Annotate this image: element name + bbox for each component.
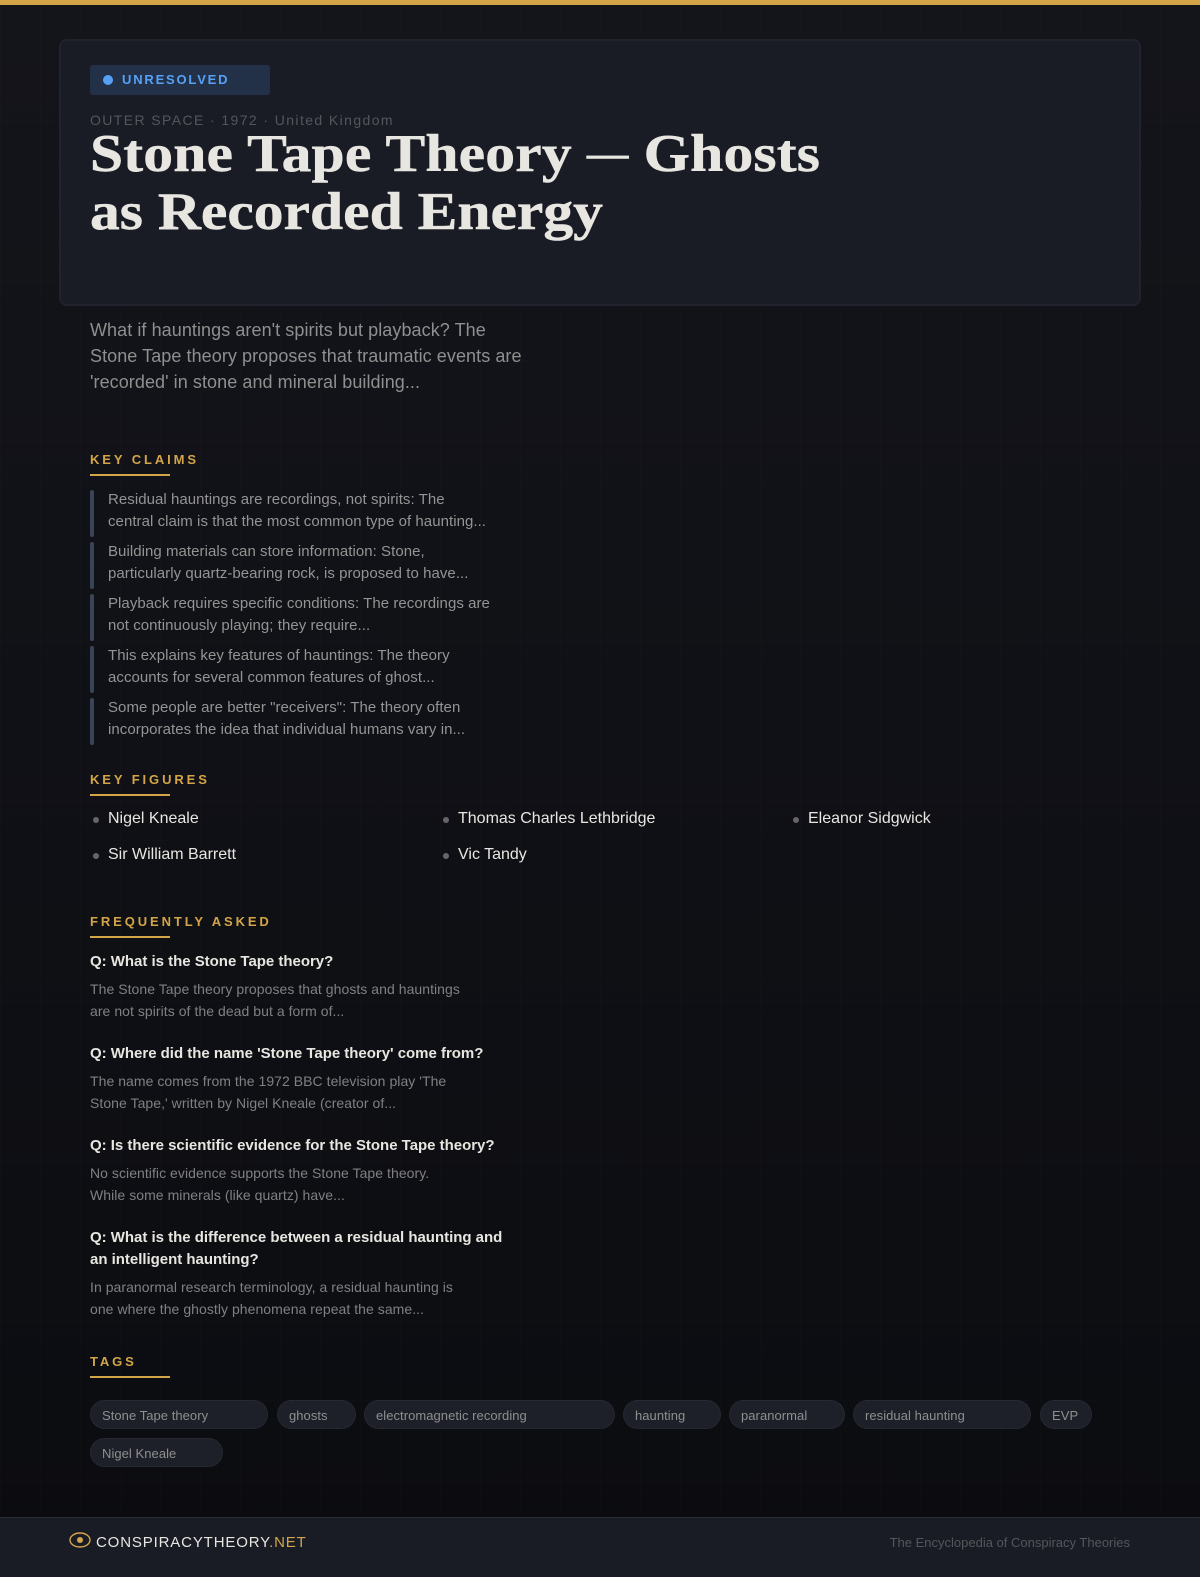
tag: electromagnetic recording — [376, 1408, 527, 1423]
figure: Sir William Barrett: Sir William Barrett — [108, 846, 236, 863]
claim 3: not continuously playing; they require... — [108, 617, 370, 634]
claim 4: accounts for several common features of ghost... — [108, 669, 435, 686]
claim 2: Building materials can store information: Stone, — [108, 543, 425, 560]
icon: eye logo — [69, 1532, 91, 1548]
tag: residual haunting — [865, 1408, 965, 1423]
lede text — [90, 320, 522, 392]
faq 2: Q: Where did the name 'Stone Tape theory' come from? — [90, 1045, 483, 1062]
figure: Eleanor Sidgwick: Eleanor Sidgwick — [808, 810, 931, 827]
tag — [623, 1400, 721, 1429]
panel: key claims — [90, 490, 490, 745]
heading: tags: TAGS — [90, 1354, 137, 1369]
faq 2: The name comes from the 1972 BBC television play 'The — [90, 1073, 446, 1089]
faq 4: In paranormal research terminology, a residual haunting is — [90, 1279, 453, 1295]
status badge — [90, 65, 270, 95]
claim 2: particularly quartz-bearing rock, is proposed to have... — [108, 565, 468, 582]
faq 2 — [90, 1045, 483, 1111]
tag — [90, 1438, 223, 1467]
panel: tags — [90, 1400, 1092, 1467]
tag — [90, 1400, 268, 1429]
figure: Vic Tandy: Vic Tandy — [458, 846, 527, 863]
tag — [1040, 1400, 1092, 1429]
tag: Stone Tape theory — [102, 1408, 208, 1423]
panel: key figures — [93, 810, 931, 863]
claim 5: Some people are better "receivers": The theory often — [108, 699, 460, 716]
faq 1: The Stone Tape theory proposes that ghosts and hauntings — [90, 981, 460, 997]
category line: OUTER SPACE · 1972 · United Kingdom — [90, 112, 394, 128]
faq 4: an intelligent haunting? — [90, 1251, 259, 1268]
tag: ghosts — [289, 1408, 328, 1423]
heading: key figures: KEY FIGURES — [90, 772, 210, 787]
faq 3: Q: Is there scientific evidence for the Stone Tape theory? — [90, 1137, 494, 1154]
faq 1: are not spirits of the dead but a form of... — [90, 1003, 344, 1019]
claim 1 — [90, 490, 486, 537]
faq 3: While some minerals (like quartz) have... — [90, 1187, 345, 1203]
heading: frequently asked: FREQUENTLY ASKED — [90, 914, 272, 929]
footer — [0, 1517, 1200, 1577]
lede text: 'recorded' in stone and mineral building... — [90, 372, 420, 392]
lede text: What if hauntings aren't spirits but playback? The — [90, 320, 486, 340]
claim 5 — [90, 698, 465, 745]
tag: haunting — [635, 1408, 685, 1423]
claim 4: This explains key features of hauntings: The theory — [108, 647, 450, 664]
claim 1: central claim is that the most common type of haunting... — [108, 513, 486, 530]
claim 2 — [90, 542, 468, 589]
faq 4: one where the ghostly phenomena repeat the same... — [90, 1301, 424, 1317]
heading: key claims: KEY CLAIMS — [90, 452, 199, 467]
faq 3 — [90, 1137, 494, 1203]
tag — [364, 1400, 615, 1429]
title — [90, 125, 820, 241]
faq 4: Q: What is the difference between a residual haunting and — [90, 1229, 502, 1246]
claim 1: Residual hauntings are recordings, not spirits: The — [108, 491, 445, 508]
faq 1: Q: What is the Stone Tape theory? — [90, 953, 333, 970]
top accent bar — [0, 0, 1200, 5]
faq 1 — [90, 953, 460, 1019]
tagline: The Encyclopedia of Conspiracy Theories — [890, 1535, 1130, 1550]
brand name: CONSPIRACYTHEORY.NET — [96, 1534, 307, 1551]
claim 3 — [90, 594, 490, 641]
figure: Nigel Kneale: Nigel Kneale — [108, 810, 199, 827]
tag — [853, 1400, 1031, 1429]
claim 4 — [90, 646, 450, 693]
faq 4 — [90, 1229, 502, 1317]
panel: header — [59, 39, 1141, 306]
lede text: Stone Tape theory proposes that traumatic events are — [90, 346, 522, 366]
tag: EVP — [1052, 1408, 1078, 1423]
tag — [729, 1400, 845, 1429]
tag: Nigel Kneale — [102, 1446, 176, 1461]
icon: status dot — [103, 75, 113, 85]
figure: Thomas Charles Lethbridge: Thomas Charles Lethbridge — [458, 810, 655, 827]
claim 3: Playback requires specific conditions: The recordings are — [108, 595, 490, 612]
faq 3: No scientific evidence supports the Stone Tape theory. — [90, 1165, 429, 1181]
tag — [277, 1400, 356, 1429]
tag: paranormal — [741, 1408, 807, 1423]
faq 2: Stone Tape,' written by Nigel Kneale (creator of... — [90, 1095, 396, 1111]
badge label: UNRESOLVED — [122, 72, 229, 87]
title: Stone Tape Theory — Ghosts — [90, 125, 820, 183]
claim 5: incorporates the idea that individual humans vary in... — [108, 721, 465, 738]
title: as Recorded Energy — [90, 183, 603, 241]
